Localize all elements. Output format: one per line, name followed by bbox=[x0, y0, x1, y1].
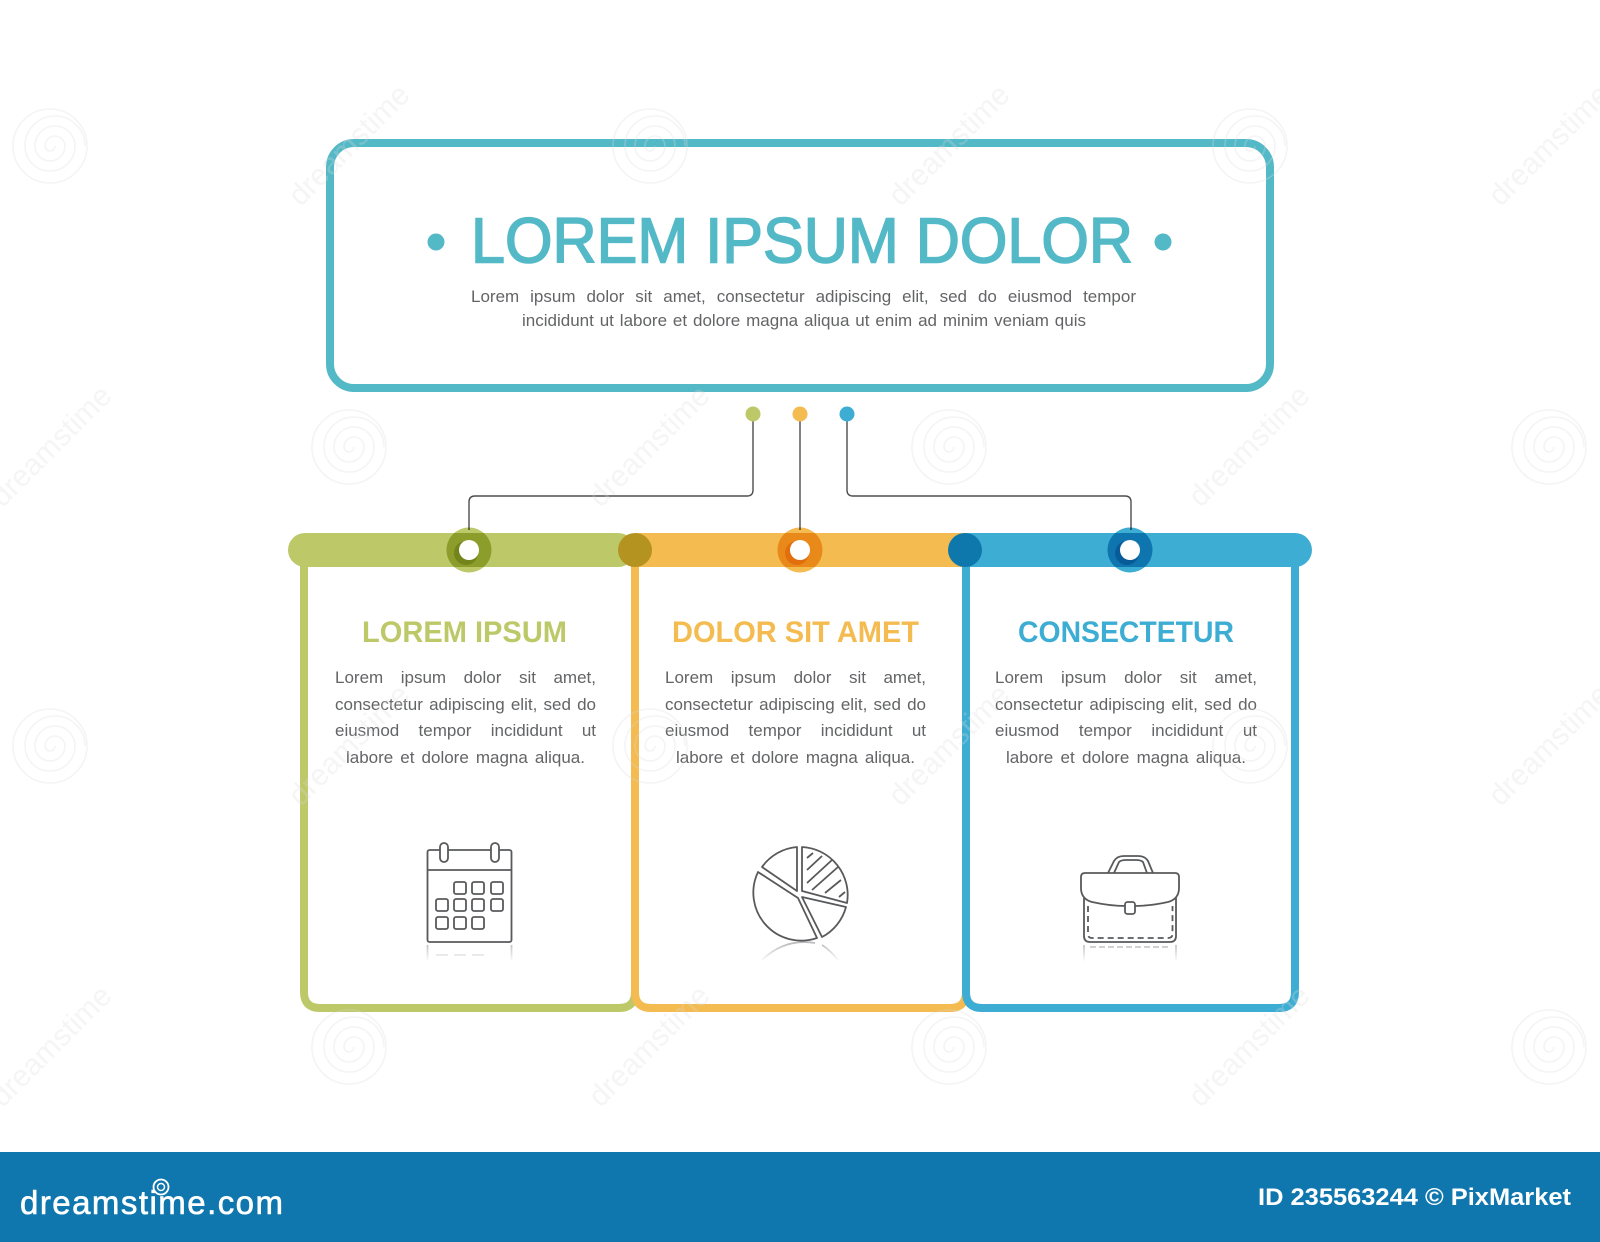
bullet: right of title bbox=[1154, 234, 1172, 250]
panel text: blue bbox=[995, 668, 1257, 767]
watermark overlay: dreamstime bbox=[282, 78, 416, 212]
title: LOREM IPSUM DOLOR bbox=[471, 204, 1133, 276]
panel text: green: consectetur adipiscing elit, sed do bbox=[335, 694, 596, 714]
panel text: green bbox=[335, 668, 596, 767]
watermark overlay: dreamstime bbox=[882, 678, 1016, 812]
panel outline: orange bbox=[635, 560, 966, 1008]
connector: green bbox=[469, 406, 760, 530]
header description: incididunt ut labore et dolore magna aliqua ut enim ad minim veniam quis bbox=[522, 311, 1086, 330]
panel text: orange: labore et dolore magna aliqua. bbox=[676, 748, 915, 767]
watermark overlay: dreamstime bbox=[582, 379, 716, 513]
connector: blue bbox=[840, 406, 1131, 530]
icon: briefcase bbox=[1081, 856, 1179, 961]
panel text: blue: consectetur adipiscing elit, sed do bbox=[995, 694, 1257, 714]
top bar: blue bbox=[966, 533, 1312, 567]
top bar: green bbox=[288, 533, 635, 567]
node: green bbox=[446, 528, 492, 572]
bullet: left of title bbox=[428, 234, 444, 250]
panel text: orange: eiusmod tempor incididunt ut bbox=[665, 721, 926, 740]
node: blue bbox=[1108, 528, 1152, 572]
panel heading: Lorem Ipsum: LOREM IPSUM bbox=[362, 616, 567, 649]
footer bar bbox=[0, 1152, 1600, 1242]
panel text: blue: eiusmod tempor incididunt ut bbox=[995, 721, 1257, 740]
watermark overlay: dreamstime bbox=[882, 78, 1016, 212]
header description: Lorem ipsum dolor sit amet, consectetur adipiscing elit, sed do eiusmod tempor bbox=[471, 287, 1136, 306]
panel outline: blue bbox=[966, 560, 1295, 1008]
connector: orange bbox=[792, 406, 808, 530]
panel text: blue: labore et dolore magna aliqua. bbox=[1006, 748, 1246, 767]
panel text: orange: consectetur adipiscing elit, sed do bbox=[665, 694, 926, 714]
header box bbox=[330, 143, 1270, 388]
icon: calendar bbox=[428, 843, 512, 961]
panel heading: Consectetur: CONSECTETUR bbox=[1018, 616, 1234, 649]
panel outline: green bbox=[304, 560, 635, 1008]
watermark overlay: dreamstime bbox=[582, 979, 716, 1113]
footer image id: ID 235563244 © PixMarket bbox=[1258, 1184, 1571, 1211]
panel text: green: eiusmod tempor incididunt ut bbox=[335, 721, 596, 740]
overlap joint: orange and blue bbox=[948, 533, 982, 567]
node: orange bbox=[778, 528, 822, 572]
panel text: orange bbox=[665, 668, 926, 767]
icon: pie chart bbox=[753, 847, 848, 960]
panel text: green: labore et dolore magna aliqua. bbox=[346, 748, 585, 767]
panel text: blue: Lorem ipsum dolor sit amet, bbox=[995, 668, 1257, 687]
header description bbox=[471, 287, 1136, 330]
watermark overlay: dreamstime bbox=[1182, 379, 1316, 513]
watermark overlay: dreamstime bbox=[1182, 979, 1316, 1113]
top bar: orange bbox=[635, 533, 966, 567]
panel text: green: Lorem ipsum dolor sit amet, bbox=[335, 668, 596, 687]
panel heading: Dolor Sit Amet: DOLOR SIT AMET bbox=[672, 616, 919, 649]
overlap joint: green and orange bbox=[618, 533, 652, 567]
watermark overlay: dreamstime bbox=[282, 678, 416, 812]
footer logo: dreamstime.com bbox=[20, 1184, 283, 1221]
panel text: orange: Lorem ipsum dolor sit amet, bbox=[665, 668, 926, 687]
